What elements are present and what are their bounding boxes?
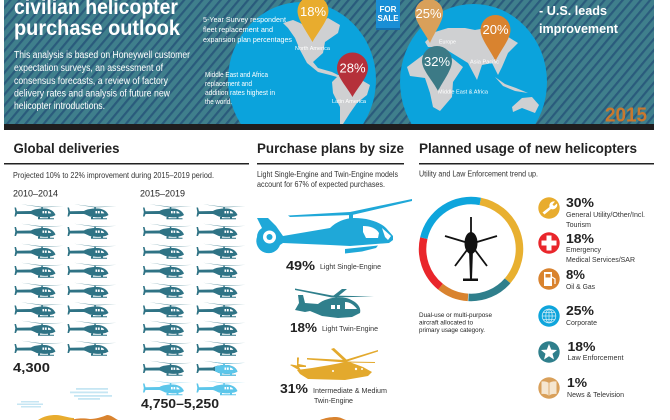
heading: Global deliveries — [14, 141, 120, 156]
Middle East note: addition rates highest in — [205, 88, 275, 97]
label 49%: 49% — [286, 258, 315, 273]
pin: Asia Pacific 20%: Asia Pacific — [470, 60, 499, 66]
item: oil and gas 8%: Oil & Gas — [566, 282, 595, 291]
item: emergency 18%: Emergency — [566, 245, 601, 254]
intro text block: helicopter introductions. — [14, 101, 105, 112]
item: law enforcement 18% — [538, 339, 624, 363]
survey note: 5-Year Survey respondent — [203, 15, 287, 24]
for sale tag: FOR — [380, 5, 397, 14]
Middle East note: replacement and — [205, 79, 252, 88]
item: news and television 1%: News & Television — [567, 390, 624, 399]
icon: wrench — [538, 197, 560, 219]
panel: purchase plans by size — [256, 141, 412, 420]
pin: Europe 25%: 25% — [415, 6, 442, 21]
title: purchase outlook — [14, 17, 180, 40]
pin: Middle East and Africa 32%: Middle East & Africa — [438, 90, 489, 96]
item: emergency 18%: Medical Services/SAR — [566, 255, 636, 264]
Middle East note: Middle East and Africa — [205, 70, 269, 79]
icon: medical cross — [538, 232, 560, 254]
footnote — [419, 312, 492, 334]
item: emergency 18% — [538, 231, 636, 264]
intro text block: This analysis is based on Honeywell customer — [14, 50, 191, 61]
label 49% — [286, 258, 381, 273]
icon: open book — [538, 377, 560, 399]
clouds — [17, 388, 112, 408]
footnote: primary usage category. — [419, 327, 485, 334]
U.S. leads callout: improvement — [539, 21, 619, 36]
pin: Europe 25% — [415, 0, 456, 46]
item: corporate 25%: Corporate — [566, 318, 597, 327]
subtitle: Utility and Law Enforcement trend up. — [419, 170, 538, 178]
item: corporate 25%: 25% — [566, 303, 594, 318]
title — [14, 0, 180, 40]
panel: header banner — [4, 0, 654, 130]
pin: Asia Pacific 20%: 20% — [482, 22, 509, 37]
U.S. leads callout — [539, 3, 619, 36]
intro text block: expectation surveys, an assessment of — [14, 63, 163, 74]
label 18%: Light Twin-Engine — [322, 324, 378, 333]
for sale tag — [376, 0, 400, 30]
label 31%: Twin-Engine — [314, 396, 353, 405]
icon: fuel pump — [538, 268, 560, 290]
icon: top-down helicopter — [445, 217, 497, 281]
pin: North America 18%: North America — [295, 46, 331, 52]
pin: North America 18%: 18% — [300, 4, 326, 19]
subtitle: Projected 10% to 22% improvement during 2015–2019 period. — [13, 171, 214, 180]
total 4,750-5,250: 4,750–5,250 — [141, 396, 219, 411]
item: oil and gas 8% — [538, 267, 595, 291]
globe: Eastern hemisphere — [400, 4, 547, 124]
item: general utility 30%: Tourism — [566, 220, 591, 229]
label 18%: 18% — [290, 320, 317, 335]
label 49%: Light Single-Engine — [320, 262, 381, 271]
U.S. leads callout: - U.S. leads — [539, 3, 607, 18]
icon: globe — [538, 305, 560, 327]
total 4,300: 4,300 — [13, 360, 50, 375]
intro text block: delivery rates and analysis of future new — [14, 88, 171, 100]
year: 2015 — [605, 104, 647, 126]
item: general utility 30%: General Utility/Other/Incl. — [566, 210, 645, 219]
helicopter: light twin-engine — [295, 288, 374, 318]
helicopter pictogram 2010-2014 — [14, 204, 116, 356]
subtitle: Light Single-Engine and Twin-Engine models — [257, 170, 398, 179]
label 18% — [290, 320, 378, 335]
pin: North America 18% — [295, 0, 331, 52]
pin: Europe 25%: Europe — [439, 40, 456, 46]
panel: global deliveries — [4, 141, 249, 420]
item: law enforcement 18%: Law Enforcement — [568, 353, 624, 362]
helicopter: light single-engine — [256, 199, 412, 254]
item: corporate 25% — [538, 303, 597, 327]
survey note — [203, 15, 292, 44]
heading: Purchase plans by size — [257, 141, 404, 156]
icon: star — [538, 341, 560, 363]
item: oil and gas 8%: 8% — [566, 267, 585, 282]
heading: Planned usage of new helicopters — [419, 141, 637, 156]
intro text block: consensus forecasts, a review of factory — [14, 76, 168, 87]
footnote: Dual-use or multi-purpose — [419, 312, 492, 319]
globe: Americas — [228, 2, 376, 124]
pin: Latin America 28% — [332, 52, 368, 105]
helicopter fragment at bottom — [320, 417, 346, 420]
item: general utility 30% — [538, 195, 645, 229]
label 31%: 31% — [280, 381, 308, 396]
helicopter: intermediate and medium twin-engine — [290, 348, 378, 380]
footnote: aircraft allocated to — [419, 320, 473, 326]
item: news and television 1% — [538, 375, 624, 399]
pin: Middle East and Africa 32% — [422, 46, 489, 96]
item: law enforcement 18%: 18% — [568, 339, 596, 354]
item: news and television 1%: 1% — [567, 375, 587, 390]
label 31%: Intermediate & Medium — [313, 386, 387, 395]
subtitle — [257, 170, 398, 189]
subtitle: account for 67% of expected purchases. — [257, 180, 385, 189]
survey note: expansion plan percentages — [203, 35, 292, 44]
for sale tag: SALE — [378, 14, 399, 23]
panel: planned usage — [419, 141, 654, 399]
pin: Latin America 28%: 28% — [339, 60, 366, 76]
pin: Middle East and Africa 32%: 32% — [424, 54, 450, 69]
label 31% — [280, 381, 387, 405]
item: emergency 18%: 18% — [566, 231, 594, 246]
helicopter pictogram 2015-2019 — [143, 204, 246, 395]
pin: Latin America 28%: Latin America — [332, 99, 367, 105]
hills — [38, 415, 74, 420]
donut chart — [423, 201, 519, 297]
item: general utility 30%: 30% — [566, 195, 594, 210]
Middle East note: the world. — [205, 97, 232, 106]
column label 2010-2014: 2010–2014 — [13, 188, 58, 198]
pin: Asia Pacific 20% — [470, 15, 510, 66]
survey note: fleet replacement and — [203, 25, 273, 34]
column label 2015-2019: 2015–2019 — [140, 188, 185, 198]
intro text block — [14, 50, 191, 112]
Middle East note — [205, 70, 275, 106]
